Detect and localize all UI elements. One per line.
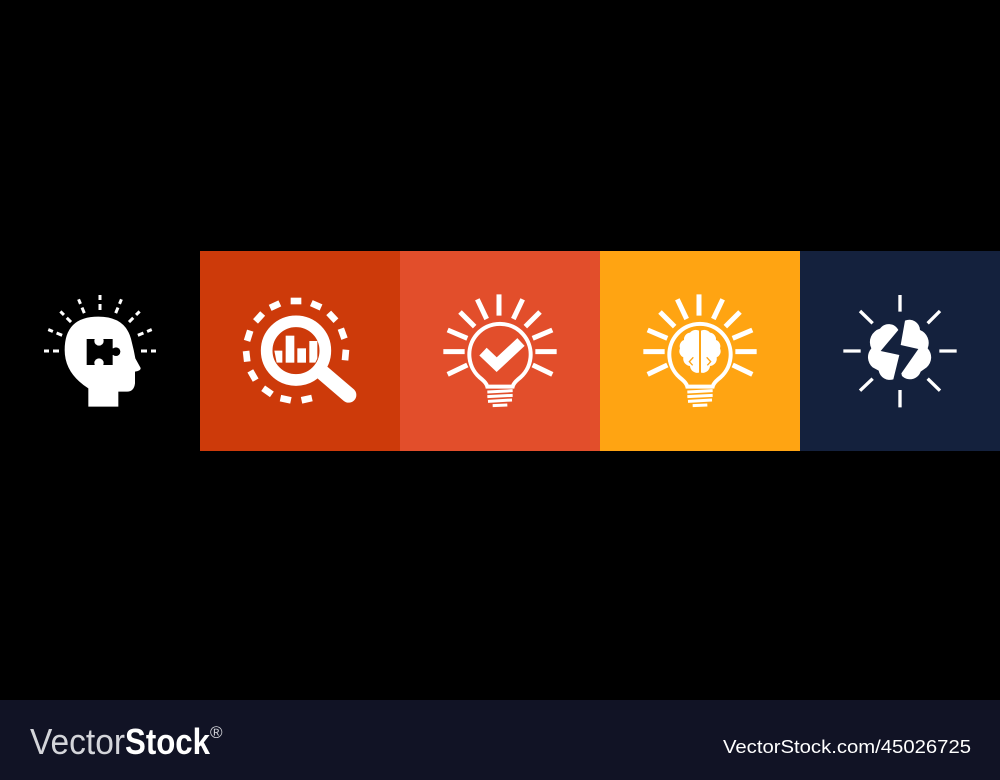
panel: bulb with check mark (400, 251, 600, 451)
icon: light bulb with check mark (443, 294, 557, 406)
logo: VectorStock: Stock (125, 721, 211, 762)
icon: brain with lightning bolt (843, 295, 957, 407)
logo: VectorStock (30, 721, 223, 762)
logo: VectorStock: Vector (30, 721, 125, 762)
panel: head with puzzle (0, 251, 200, 451)
footer bar (0, 700, 1000, 780)
panel: brain with lightning (800, 251, 1000, 451)
image id text: VectorStock.com/45026725 (723, 737, 971, 757)
icon: magnifying glass with bar chart (243, 298, 349, 404)
panel: bulb with brain (600, 251, 800, 451)
icon: light bulb with brain (643, 294, 757, 406)
icon: head with puzzle piece (44, 295, 156, 407)
logo: VectorStock: ® (210, 723, 223, 742)
panel: magnifier (200, 251, 400, 451)
